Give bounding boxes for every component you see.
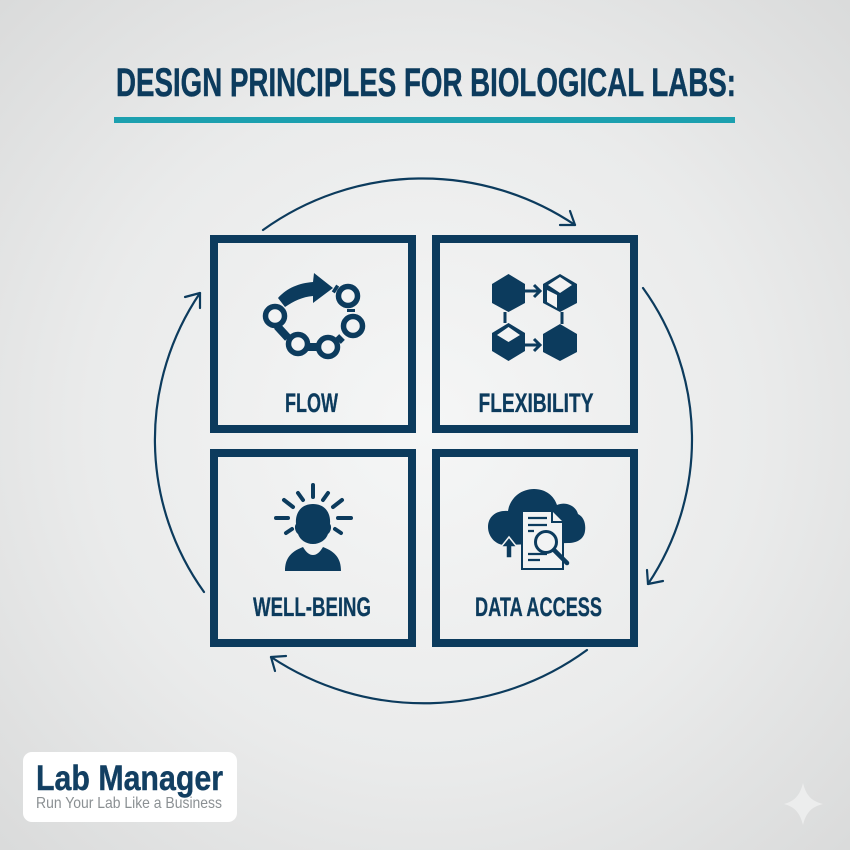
- arrow: right: [643, 288, 692, 584]
- arrow: left: [155, 293, 204, 592]
- icon: flow cycle: [266, 273, 362, 356]
- panel: flow: [214, 239, 412, 429]
- logo: lab manager: Run Your Lab Like a Business: [36, 795, 222, 812]
- cycle arrows: [155, 178, 692, 703]
- icon: sparkle: [784, 783, 823, 825]
- arrow: bottom: [271, 650, 587, 703]
- label: flow: FLOW: [285, 388, 338, 418]
- icon: hexagons and cubes: [492, 274, 577, 361]
- label: well-being: WELL-BEING: [253, 592, 371, 622]
- panel: flexibility: [436, 239, 634, 429]
- arrow: top: [263, 178, 575, 230]
- icon: person with rays: [276, 485, 351, 571]
- panel: well-being: [214, 453, 412, 643]
- title underline: [114, 117, 735, 123]
- icon: cloud, document and magnifier: [488, 489, 585, 569]
- logo: lab manager: Lab Manager: [36, 759, 223, 798]
- panel: data access: [436, 453, 634, 643]
- logo: lab manager: [23, 752, 237, 822]
- label: flexibility: FLEXIBILITY: [478, 388, 594, 418]
- label: data access: DATA ACCESS: [475, 592, 602, 622]
